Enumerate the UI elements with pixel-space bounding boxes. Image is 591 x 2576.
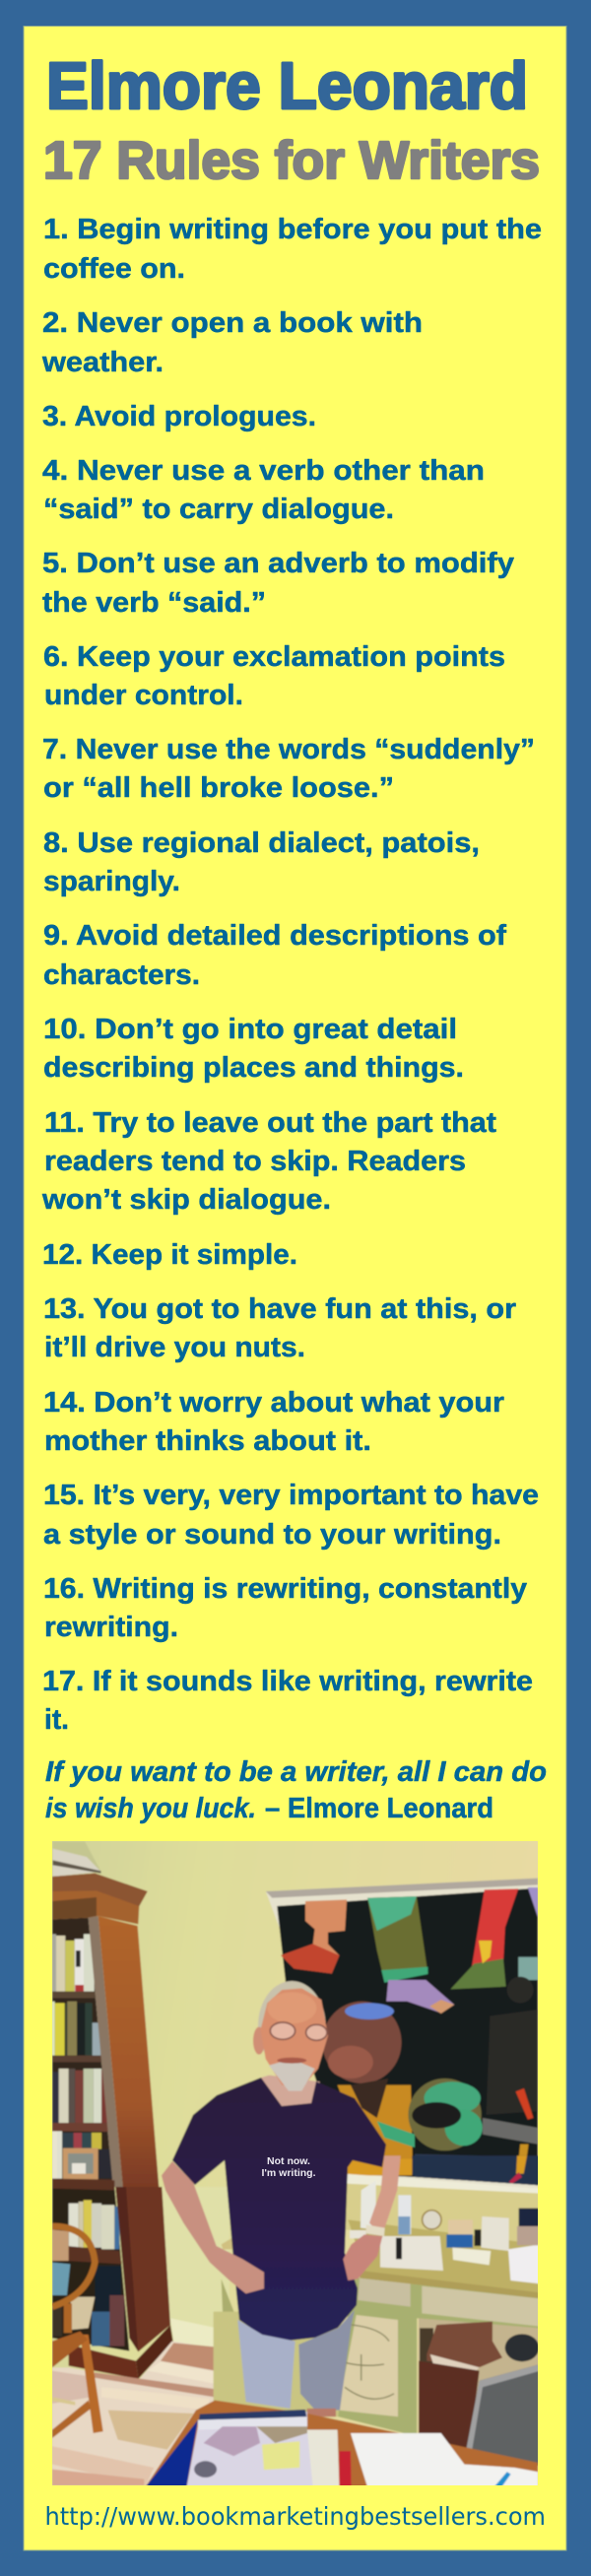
rule 6: under control. [44, 680, 243, 711]
rule 14: 14. Don’t worry about what your [43, 1387, 504, 1419]
title: Elmore Leonard: Elmore Leonard [46, 49, 528, 123]
rule 5: 5. Don’t use an adverb to modify [42, 548, 514, 579]
quote: is wish you luck. [45, 1793, 256, 1824]
rule 13: 13. You got to have fun at this, or [43, 1293, 516, 1325]
rule 4: “said” to carry dialogue. [43, 494, 394, 525]
rule 15 [43, 1480, 539, 1551]
rule 14 [43, 1387, 504, 1457]
rule 16: rewriting. [44, 1612, 178, 1643]
rule 15: a style or sound to your writing. [43, 1519, 501, 1551]
rule 4 [42, 455, 485, 525]
t-shirt slogan: Not now. [267, 2155, 310, 2167]
rule 1 [43, 214, 542, 285]
rule 13 [43, 1293, 516, 1363]
desk and objects [214, 2155, 540, 2466]
rule 2 [41, 307, 423, 378]
rule 9 [43, 920, 506, 991]
website URL: http://www.bookmarketingbestsellers.com [45, 2502, 546, 2531]
rule 8: sparingly. [43, 866, 180, 897]
rule 17 [42, 1666, 533, 1736]
rule 11: readers tend to skip. Readers [44, 1146, 466, 1177]
t-shirt slogan [262, 2157, 315, 2178]
rule 1: coffee on. [43, 253, 185, 285]
rule 9: 9. Avoid detailed descriptions of [43, 920, 506, 952]
bookcase upper [52, 1874, 159, 2187]
quote [45, 1756, 547, 1824]
rule 8: 8. Use regional dialect, patois, [43, 827, 480, 859]
rule 14: mother thinks about it. [44, 1425, 371, 1457]
foreground table, magazine and papers [145, 2401, 538, 2487]
rules list [41, 214, 547, 1824]
t-shirt slogan: I'm writing. [262, 2167, 316, 2179]
rule 10: 10. Don’t go into great detail [43, 1014, 457, 1045]
rule 6: 6. Keep your exclamation points [43, 641, 505, 673]
rule 2: weather. [41, 347, 164, 378]
rule 3: 3. Avoid prologues. [42, 401, 316, 432]
rule 10 [43, 1014, 464, 1084]
rule 9: characters. [43, 959, 200, 991]
rule 4: 4. Never use a verb other than [42, 455, 485, 487]
rule 5 [42, 548, 514, 619]
quote: If you want to be a writer, all I can do [45, 1756, 547, 1788]
rule 12: 12. Keep it simple. [42, 1239, 297, 1271]
rule 11 [41, 1107, 496, 1216]
photo: Elmore Leonard in his study [49, 1837, 542, 2489]
rule 16: 16. Writing is rewriting, constantly [43, 1573, 527, 1605]
bookcase lower, wall, floor and chair [52, 2180, 246, 2485]
subtitle: 17 Rules for Writers: 17 Rules for Writers [43, 131, 540, 190]
rule 1: 1. Begin writing before you put the [43, 214, 542, 245]
rule 11: won’t skip dialogue. [41, 1184, 331, 1216]
rule 10: describing places and things. [43, 1052, 464, 1084]
rule 17: 17. If it sounds like writing, rewrite [42, 1666, 533, 1697]
man [162, 1981, 401, 2416]
rule 7: or “all hell broke loose.” [43, 772, 394, 804]
rule 7 [42, 734, 535, 804]
rule 5: the verb “said.” [42, 587, 266, 619]
rule 11: 11. Try to leave out the part that [44, 1107, 496, 1139]
rule 8 [43, 827, 480, 897]
rule 16 [43, 1573, 527, 1643]
rule 7: 7. Never use the words “suddenly” [42, 734, 535, 765]
rule 15: 15. It’s very, very important to have [43, 1480, 539, 1511]
rule 2: 2. Never open a book with [42, 307, 423, 339]
quote: – Elmore Leonard [265, 1793, 493, 1824]
rule 17: it. [44, 1704, 69, 1736]
rule 13: it’ll drive you nuts. [44, 1332, 305, 1363]
rule 6 [43, 641, 505, 711]
